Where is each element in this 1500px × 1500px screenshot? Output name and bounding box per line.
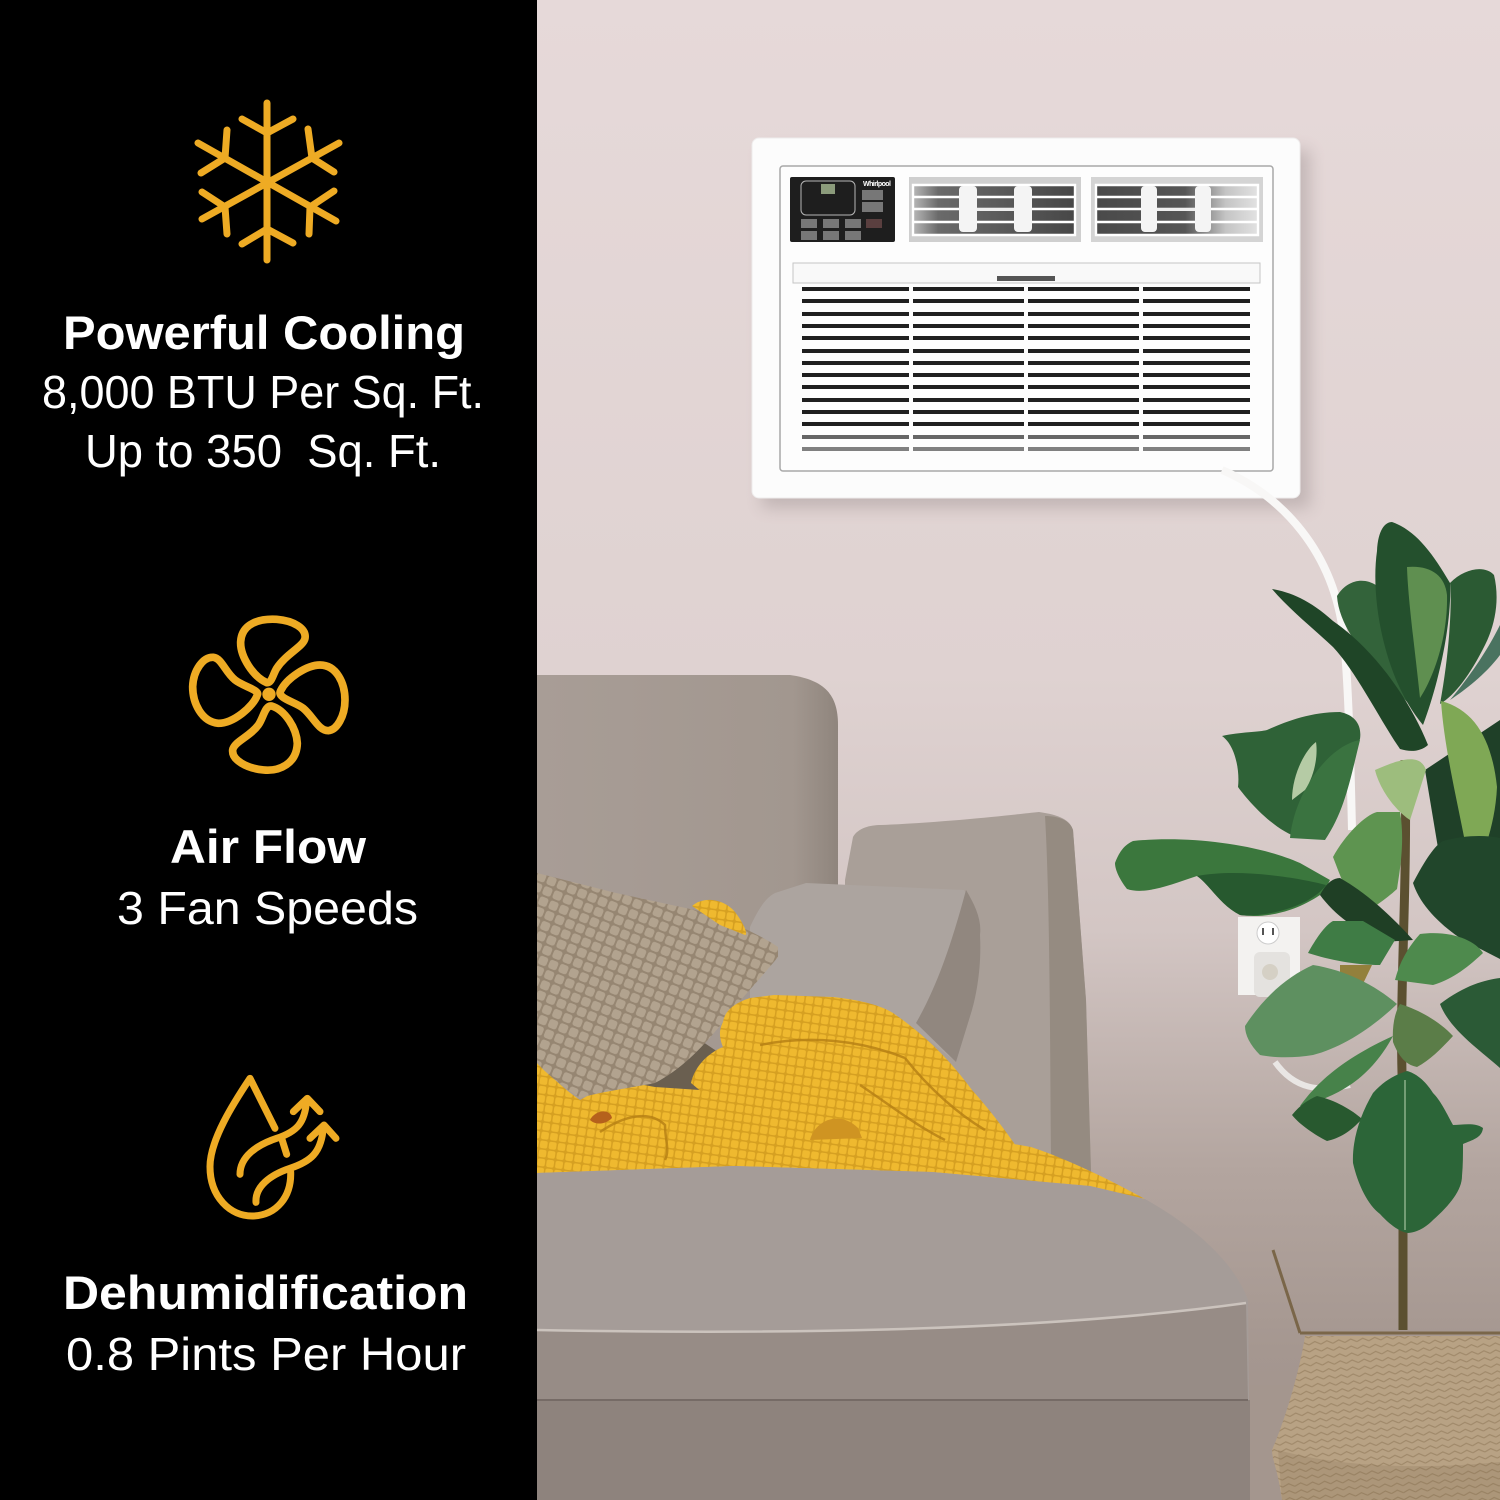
green mid leaf bbox=[1308, 921, 1395, 965]
far left leaf bbox=[1115, 839, 1330, 916]
icon: water drop with arrows bbox=[210, 1078, 336, 1216]
lower yellow throw bbox=[537, 1063, 1145, 1199]
plant bbox=[1115, 522, 1500, 1330]
tan textured pillow bbox=[537, 873, 778, 1098]
plant stem bbox=[1402, 760, 1406, 1330]
intake grille louvers bbox=[802, 289, 1250, 449]
left middle leaf bbox=[1222, 712, 1360, 838]
pale lower leaf bbox=[1245, 965, 1397, 1057]
olive lower leaf bbox=[1393, 1004, 1453, 1067]
text: 3 fan speeds: 3 Fan Speeds bbox=[117, 882, 418, 934]
right lower dark leaf bbox=[1440, 978, 1500, 1068]
icon: snowflake bbox=[198, 103, 339, 260]
seat front bbox=[537, 1303, 1250, 1500]
panel: black feature column bbox=[0, 0, 537, 1500]
shadow under tan pillow bbox=[600, 1040, 730, 1100]
inner leaf bbox=[1290, 740, 1360, 840]
seat lower section bbox=[537, 1400, 1250, 1500]
sofa seat bbox=[537, 1166, 1250, 1500]
cabinet front bbox=[780, 166, 1273, 471]
heading: Air Flow: Air Flow bbox=[170, 820, 366, 873]
right top leaf bbox=[1440, 569, 1497, 704]
right dark leaf bbox=[1413, 836, 1500, 959]
far left leaf underside bbox=[1197, 873, 1326, 916]
wall outlet bbox=[1238, 917, 1300, 997]
grey pillow bbox=[750, 883, 980, 1062]
control panel bbox=[790, 177, 895, 242]
icon: fan bbox=[193, 619, 345, 770]
seat piping bbox=[537, 1303, 1246, 1332]
text: 0.8 pints per hour: 0.8 Pints Per Hour bbox=[66, 1328, 466, 1380]
throw inner fold bbox=[810, 1119, 862, 1140]
woven basket planter bbox=[1272, 1250, 1500, 1500]
pillow side panel bbox=[916, 890, 980, 1062]
right dark background foliage bbox=[1425, 720, 1500, 860]
heading: Powerful Cooling: Powerful Cooling bbox=[63, 306, 465, 359]
leaf behind long leaf bbox=[1337, 581, 1420, 717]
light green leaf bbox=[1441, 701, 1497, 883]
right air vent bbox=[1091, 177, 1263, 242]
unit shadow bbox=[762, 150, 1310, 508]
air conditioner unit bbox=[752, 138, 1310, 508]
bottom leaf midrib bbox=[1404, 1080, 1406, 1230]
sofa side cushion bbox=[845, 812, 1091, 1172]
pale strip bbox=[1292, 742, 1317, 800]
lower cord loop bbox=[1275, 1062, 1350, 1088]
yellow throw corner bbox=[692, 900, 746, 935]
small low leaf bbox=[1292, 1096, 1362, 1141]
yellow throw main fold bbox=[691, 995, 1031, 1160]
pale edge leaf bbox=[1450, 625, 1500, 700]
left air vent bbox=[909, 177, 1081, 242]
control panel: Whirlpool bbox=[863, 181, 891, 188]
photo: living room wall bbox=[537, 0, 1500, 1500]
power cord bbox=[1222, 470, 1352, 830]
dark mid leaf bbox=[1320, 878, 1413, 942]
seat lower seam bbox=[537, 1399, 1248, 1401]
long dark leaf bbox=[1272, 589, 1428, 751]
heading: Dehumidification: Dehumidification bbox=[63, 1266, 468, 1319]
center light leaf bbox=[1333, 812, 1402, 915]
brown spot leaf bbox=[1340, 965, 1372, 990]
center pale leaf bbox=[1375, 759, 1426, 820]
throw inner fold shadow bbox=[590, 1111, 612, 1124]
slim leaf bbox=[1300, 1036, 1393, 1106]
pale fold of top leaf bbox=[1407, 567, 1447, 698]
side cushion strip bbox=[1045, 816, 1091, 1172]
sofa backrest bbox=[537, 675, 838, 1100]
text: 8,000 BTU per sq ft: 8,000 BTU Per Sq. Ft. bbox=[42, 366, 484, 418]
filter door bar bbox=[793, 263, 1260, 283]
baseboard bbox=[1250, 1385, 1290, 1500]
text: up to 350 sq ft: Up to 350 Sq. Ft. bbox=[85, 425, 441, 477]
big top leaf bbox=[1375, 522, 1450, 725]
throw fold creases bbox=[600, 1040, 985, 1160]
right green leaf bbox=[1395, 933, 1483, 985]
bottom large leaf bbox=[1353, 1071, 1483, 1233]
wall sleeve frame bbox=[752, 138, 1300, 498]
